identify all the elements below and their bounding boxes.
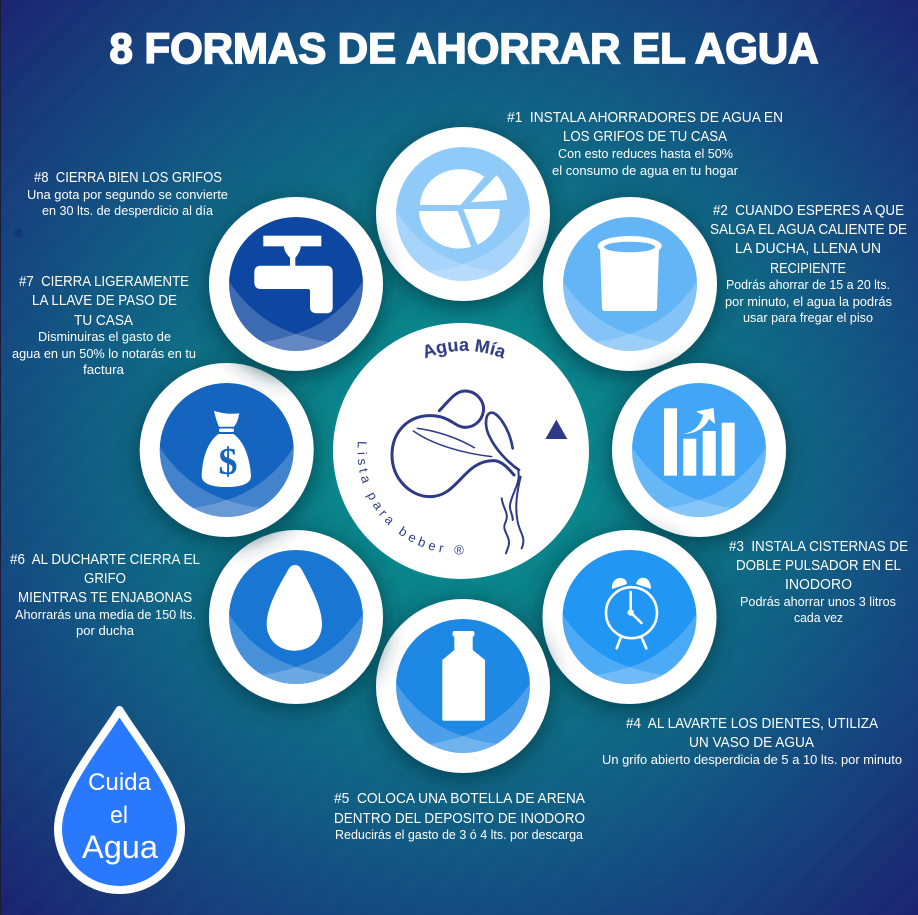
tip 4 text: #4 AL LAVARTE LOS DIENTES, UTILIZA [626,716,878,732]
tip 4 text: Un grifo abierto desperdicia de 5 a 10 lts. por minuto [602,753,902,767]
circle 1: pie chart icon [376,127,550,301]
tip 6 text [10,552,200,638]
tip 2 text [710,203,907,325]
tip 2 text: por minuto, el agua la podrás [725,295,892,309]
tip 7 text: Disminuiras el gasto de [38,330,171,344]
tip 2 text: Podrás ahorrar de 15 a 20 lts. [726,278,890,292]
tip 6 text: MIENTRAS TE ENJABONAS [18,590,192,606]
circle 3: bar chart icon [612,363,786,537]
circle 8: faucet icon [209,197,383,371]
tip 5 text [334,791,585,842]
tip 2 text: RECIPIENTE [770,261,846,277]
water drop callout: Agua [82,829,159,865]
tip 5 text: Reducirás el gasto de 3 ó 4 lts. por descarga [335,828,583,842]
tip 8 text [27,170,228,218]
circle 2: cup icon [543,197,717,371]
title: 8 FORMAS DE AHORRAR EL AGUA [110,25,818,73]
tip 7 text: factura [83,363,124,377]
tip 1 text: el consumo de agua en tu hogar [552,164,738,178]
tip 2 text: LA DUCHA, LLENA UN [735,241,881,257]
center logo circle [333,323,589,579]
circle 6: water drop icon [209,530,383,704]
tip 6 text: GRIFO [84,571,126,587]
brand name: Agua Mía [425,339,504,358]
tip 1 text [507,110,783,178]
tip 6 text: por ducha [76,624,134,638]
tip 4 text: UN VASO DE AGUA [689,735,814,751]
tip 3 text [729,539,908,625]
tip 3 text: INODORO [785,577,852,593]
tip 7 text: #7 CIERRA LIGERAMENTE [19,274,189,290]
tip 7 text: agua en un 50% lo notarás en tu [12,347,196,361]
tip 3 text: DOBLE PULSADOR EN EL [736,558,901,574]
tagline: Lista para beber ® [358,442,464,554]
tip 8 text: #8 CIERRA BIEN LOS GRIFOS [34,170,222,186]
tip 8 text: Una gota por segundo se convierte [27,188,228,202]
tip 4 text [602,716,902,767]
tip 1 text: #1 INSTALA AHORRADORES DE AGUA EN [507,110,783,126]
tip 8 text: en 30 lts. de desperdicio al día [42,204,213,218]
tip 7 text: LA LLAVE DE PASO DE [32,293,177,309]
circle 7: money bag icon [140,363,314,537]
circle 5: bottle icon [376,599,550,773]
tip 2 text: SALGA EL AGUA CALIENTE DE [710,222,907,238]
tip 3 text: Podrás ahorrar unos 3 litros [740,595,896,609]
tip 5 text: DENTRO DEL DEPOSITO DE INODORO [334,811,585,827]
water drop callout: el [110,802,128,829]
water drop callout: Cuida [88,769,152,796]
tip 7 text: TU CASA [74,313,133,329]
tip 7 text [12,274,196,377]
tip 5 text: #5 COLOCA UNA BOTELLA DE ARENA [334,791,585,807]
water drop callout [58,710,181,890]
tip 1 text: Con esto reduces hasta el 50% [558,147,733,161]
tip 1 text: LOS GRIFOS DE TU CASA [563,129,727,145]
tip 3 text: cada vez [794,611,843,625]
tip 6 text: Ahorrarás una media de 150 lts. [15,608,196,622]
circle 4: alarm clock icon [542,530,716,704]
tip 2 text: usar para fregar el piso [743,311,873,325]
tip 2 text: #2 CUANDO ESPERES A QUE [713,203,904,219]
pitcher logo [392,391,567,553]
tip 6 text: #6 AL DUCHARTE CIERRA EL [10,552,200,568]
circle 7: money bag icon: $ [218,441,238,483]
